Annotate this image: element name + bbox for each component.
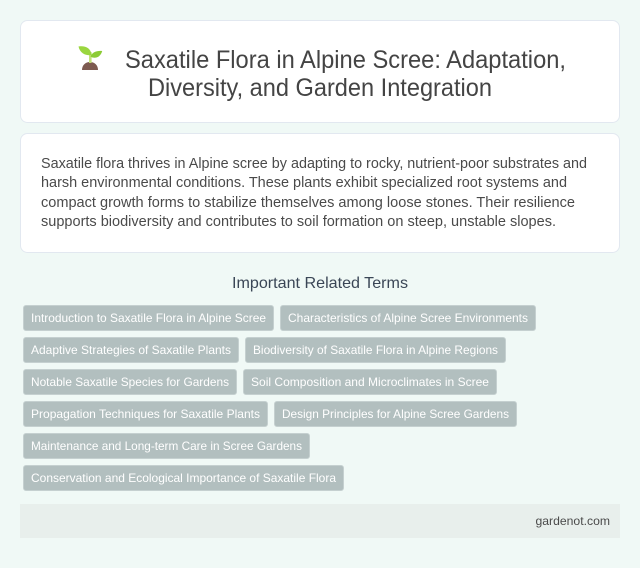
text block: description paragraph: supports biodiversity and contributes to soil formation on steep, unstable slopes.	[41, 214, 556, 230]
text block: description paragraph	[41, 156, 587, 230]
footer: gardenot.com	[536, 514, 610, 528]
icon: seedling	[78, 46, 102, 70]
chip: biodiversity	[246, 338, 506, 362]
chip: soil composition: Soil Composition and Microclimates in Scree	[251, 375, 489, 389]
heading: important related terms: Important Related Terms	[232, 275, 408, 292]
chip: maintenance	[24, 434, 310, 458]
chip: propagation	[24, 402, 268, 426]
chip: conservation: Conservation and Ecological Importance of Saxatile Flora	[31, 471, 336, 485]
chip: design principles: Design Principles for Alpine Scree Gardens	[282, 407, 509, 421]
panel: related term chips	[24, 306, 536, 490]
panel: description	[20, 134, 620, 252]
chip: introduction	[24, 306, 274, 330]
chip: soil composition	[244, 370, 496, 394]
title: Diversity, and Garden Integration	[148, 74, 492, 102]
chip: notable species	[24, 370, 236, 394]
chip: biodiversity: Biodiversity of Saxatile Flora in Alpine Regions	[253, 343, 498, 357]
text block: description paragraph: harsh environmental conditions. These plants exhibit specialized root systems and	[41, 175, 567, 191]
footer	[20, 504, 620, 538]
chip: adaptive strategies: Adaptive Strategies of Saxatile Plants	[31, 343, 231, 357]
chip: characteristics: Characteristics of Alpine Scree Environments	[288, 311, 528, 325]
chip: notable species: Notable Saxatile Species for Gardens	[31, 375, 229, 389]
text block: description paragraph: compact growth forms to stabilize themselves among loose stones. Their resilience	[41, 195, 575, 211]
title: Saxatile Flora in Alpine Scree: Adaptation,	[125, 46, 566, 74]
chip: introduction: Introduction to Saxatile Flora in Alpine Scree	[31, 311, 266, 325]
chip: propagation: Propagation Techniques for Saxatile Plants	[31, 407, 260, 421]
chip: maintenance: Maintenance and Long-term Care in Scree Gardens	[31, 439, 302, 453]
chip: design principles	[274, 402, 516, 426]
chip: characteristics	[280, 306, 536, 330]
panel: title card	[20, 20, 620, 122]
text block: description paragraph: Saxatile flora thrives in Alpine scree by adapting to rocky, nutrient-poor substrates and	[41, 156, 587, 172]
chip: conservation	[24, 466, 344, 490]
chip: adaptive strategies	[24, 338, 238, 362]
title	[125, 46, 566, 102]
